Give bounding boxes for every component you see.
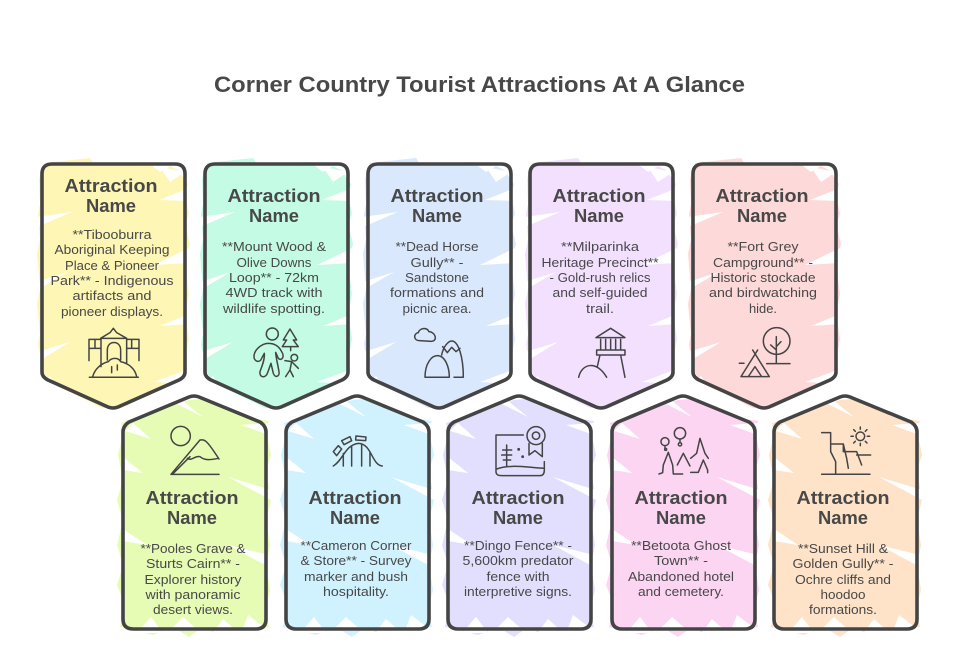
card heading: Name bbox=[493, 508, 543, 528]
card heading: Name bbox=[249, 206, 299, 226]
card description: Olive Downs bbox=[236, 256, 312, 270]
card description bbox=[50, 228, 174, 319]
icon: hikers and tree bbox=[254, 328, 298, 377]
card heading: Name bbox=[737, 206, 787, 226]
card description: Golden Gully** - bbox=[792, 557, 894, 571]
panel: Mount Wood bbox=[200, 158, 353, 408]
card shape indigo bbox=[442, 396, 596, 637]
icon: balloons over peaks bbox=[659, 428, 708, 474]
card heading bbox=[716, 186, 808, 226]
card description: desert views. bbox=[153, 603, 233, 617]
card description bbox=[542, 240, 659, 316]
card description bbox=[709, 240, 817, 316]
card description: picnic area. bbox=[402, 302, 472, 316]
card description: - Gold-rush relics bbox=[550, 271, 650, 285]
card heading: Attraction bbox=[552, 186, 646, 206]
icon: cloud and rocks bbox=[415, 329, 463, 377]
card description: Abandoned hotel bbox=[628, 570, 734, 584]
card heading: Name bbox=[818, 508, 868, 528]
card description: 4WD track with bbox=[226, 286, 323, 300]
card description: **Milparinka bbox=[561, 240, 639, 254]
card description: Ochre cliffs and bbox=[795, 573, 891, 587]
icon: cliffs and sun bbox=[822, 427, 871, 474]
card description: Loop** - 72km bbox=[229, 271, 319, 285]
card description: Sturts Cairn** - bbox=[146, 557, 240, 571]
card description: Park** - Indigenous bbox=[50, 274, 174, 288]
card description: interpretive signs. bbox=[464, 585, 572, 599]
panel: Cameron Corner bbox=[280, 396, 434, 637]
icon: tent and tree bbox=[739, 328, 790, 377]
card heading: Attraction bbox=[634, 488, 728, 508]
card description: trail. bbox=[586, 302, 614, 316]
card heading bbox=[390, 186, 484, 226]
card heading: Attraction bbox=[228, 186, 320, 206]
title: Corner Country Tourist Attractions At A Glance bbox=[214, 72, 745, 97]
card heading bbox=[796, 488, 890, 528]
icon: roller coaster track bbox=[333, 436, 382, 466]
card shape blue bbox=[363, 158, 516, 408]
card description: formations and bbox=[390, 286, 484, 300]
card description: fence with bbox=[486, 570, 550, 584]
card description: formations. bbox=[809, 603, 877, 617]
card description bbox=[140, 542, 246, 617]
card description: **Dingo Fence** - bbox=[464, 539, 572, 553]
card description: hospitality. bbox=[323, 585, 389, 599]
card description: Town** - bbox=[654, 554, 708, 568]
card description: Campground** - bbox=[713, 256, 813, 270]
card description: **Cameron Corner bbox=[300, 539, 412, 553]
card description: artifacts and bbox=[72, 289, 152, 303]
card description: **Mount Wood & bbox=[222, 240, 327, 254]
panel: Tibooburra bbox=[37, 158, 190, 408]
card description: **Pooles Grave & bbox=[140, 542, 246, 556]
card description bbox=[222, 240, 327, 316]
card heading: Name bbox=[412, 206, 462, 226]
card description: Explorer history bbox=[144, 573, 242, 587]
icon: museum bbox=[89, 328, 139, 377]
card description bbox=[300, 539, 412, 599]
card description: Gully** - bbox=[410, 256, 464, 270]
card description bbox=[462, 539, 574, 599]
card description bbox=[390, 240, 484, 316]
card description: Place & Pioneer bbox=[65, 259, 159, 273]
card heading: Name bbox=[167, 508, 217, 528]
panel: Milparinka bbox=[525, 158, 678, 408]
card description: **Betoota Ghost bbox=[631, 539, 732, 553]
card heading: Name bbox=[330, 508, 380, 528]
panel: Fort Grey bbox=[688, 158, 841, 408]
card heading bbox=[552, 186, 646, 226]
icon: heritage lighthouse bbox=[579, 328, 625, 377]
card heading bbox=[634, 488, 728, 528]
card heading: Attraction bbox=[716, 186, 808, 206]
icon: sun and mountain bbox=[171, 426, 219, 474]
card shape pink bbox=[606, 396, 760, 637]
panel: Dead Horse Gully bbox=[363, 158, 516, 408]
card description: **Tibooburra bbox=[72, 228, 152, 242]
card heading: Attraction bbox=[308, 488, 402, 508]
card description: **Fort Grey bbox=[728, 240, 799, 254]
card heading: Name bbox=[86, 196, 136, 216]
card heading: Attraction bbox=[390, 186, 484, 206]
card description: Sandstone bbox=[405, 271, 469, 285]
card description: with panoramic bbox=[144, 588, 240, 602]
card description bbox=[628, 539, 734, 599]
card shape red bbox=[688, 158, 841, 408]
card description: Aboriginal Keeping bbox=[54, 243, 170, 257]
card heading bbox=[146, 488, 238, 528]
card description: 5,600km predator bbox=[462, 554, 574, 568]
card heading: Name bbox=[574, 206, 624, 226]
card heading: Attraction bbox=[64, 176, 158, 196]
card description: & Store** - Survey bbox=[300, 554, 412, 568]
card heading: Attraction bbox=[796, 488, 890, 508]
card description: marker and bush bbox=[304, 570, 408, 584]
card shape cyan bbox=[280, 396, 434, 637]
card shape mint bbox=[200, 158, 353, 408]
card description: **Dead Horse bbox=[396, 240, 479, 254]
card heading bbox=[228, 186, 320, 226]
card shape yellow bbox=[37, 158, 190, 408]
card description: hoodoo bbox=[820, 588, 866, 602]
card description: and birdwatching bbox=[709, 286, 817, 300]
card shape lime bbox=[117, 396, 271, 637]
card description: and cemetery. bbox=[638, 585, 724, 599]
card heading bbox=[308, 488, 402, 528]
card heading: Name bbox=[656, 508, 706, 528]
card heading bbox=[472, 488, 564, 528]
card heading bbox=[64, 176, 158, 216]
card description: hide. bbox=[749, 302, 777, 316]
card shape purple bbox=[525, 158, 678, 408]
panel: Dingo Fence bbox=[442, 396, 596, 637]
card description: Historic stockade bbox=[710, 271, 816, 285]
card shape orange bbox=[768, 396, 922, 637]
card heading: Attraction bbox=[146, 488, 238, 508]
card description: wildlife spotting. bbox=[222, 302, 325, 316]
panel: Betoota bbox=[606, 396, 760, 637]
card description: Heritage Precinct** bbox=[542, 256, 659, 270]
card description: **Sunset Hill & bbox=[798, 542, 889, 556]
panel: Sunset Hill bbox=[768, 396, 922, 637]
card heading: Attraction bbox=[472, 488, 564, 508]
card description bbox=[792, 542, 894, 617]
card description: and self-guided bbox=[552, 286, 648, 300]
icon: map with award badge bbox=[496, 427, 545, 476]
card description: pioneer displays. bbox=[61, 305, 163, 319]
panel: Pooles Grave bbox=[117, 396, 271, 637]
